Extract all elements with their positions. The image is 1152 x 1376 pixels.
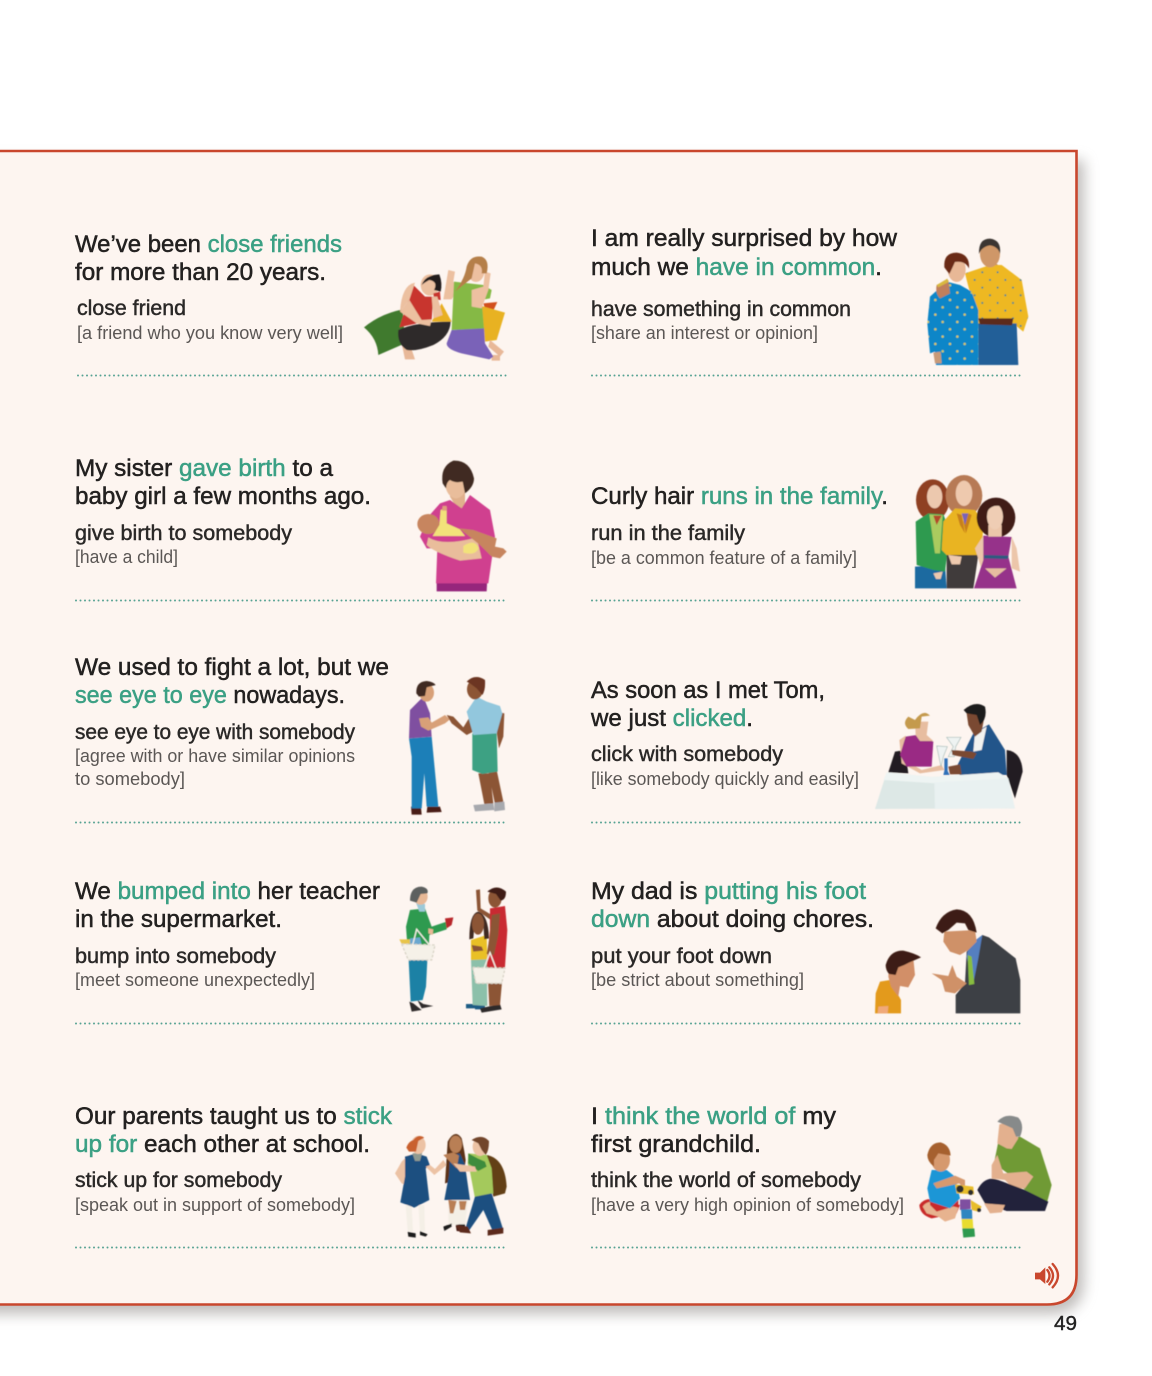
entry: see eye to eye: to somebody] (75, 769, 185, 789)
entry: gave birth: baby girl a few months ago. (75, 483, 371, 510)
entry: runs in the family (591, 475, 1021, 600)
entry: see eye to eye: see eye to eye nowadays. (75, 682, 345, 709)
entry: bumped into (75, 878, 507, 1024)
definition: [have a child] (75, 547, 178, 567)
entry: have in common: much we have in common. (591, 254, 882, 281)
definition: [be a common feature of a family] (591, 548, 857, 568)
example sentence: I think the world of my (591, 1103, 836, 1130)
illustration: woman and man in patterned shirts (927, 239, 1028, 365)
example sentence: We’ve been close friends (75, 231, 342, 258)
entry: bumped into: in the supermarket. (75, 906, 282, 933)
definition: [speak out in support of somebody] (75, 1195, 355, 1215)
entry: gave birth (75, 455, 507, 600)
idiom term: click with somebody (591, 743, 784, 766)
idiom term: close friend (77, 297, 186, 320)
idiom term: run in the family (591, 522, 746, 545)
example sentence: My dad is putting his foot (591, 878, 866, 905)
page number: 49 (1054, 1313, 1077, 1335)
definition: [share an interest or opinion] (591, 323, 818, 343)
entry: think the world of: first grandchild. (591, 1131, 761, 1158)
idiom term: have something in common (591, 298, 851, 321)
entry: see eye to eye (75, 654, 505, 822)
example sentence: As soon as I met Tom, (591, 677, 825, 704)
example sentence: My sister gave birth to a (75, 455, 334, 482)
example sentence: Our parents taught us to stick (75, 1103, 393, 1130)
idiom term: think the world of somebody (591, 1169, 862, 1192)
definition: [like somebody quickly and easily] (591, 769, 859, 789)
definition: [have a very high opinion of somebody] (591, 1195, 904, 1215)
illustration: father scolding boy (875, 909, 1020, 1013)
example sentence: We bumped into her teacher (75, 878, 380, 905)
idiom term: give birth to somebody (75, 522, 292, 545)
entry: clicked (590, 677, 1023, 822)
idiom term: see eye to eye with somebody (75, 721, 355, 744)
entry: putting his foot down (591, 878, 1021, 1024)
entry: have in common (591, 225, 1028, 376)
entry: close friends: for more than 20 years. (75, 259, 326, 286)
example sentence: We used to fight a lot, but we (75, 654, 389, 681)
illustration: meeting a teacher in the supermarket (399, 887, 507, 1013)
entry: close friends (75, 231, 507, 376)
definition: [agree with or have similar opinions (75, 746, 355, 766)
definition: [meet someone unexpectedly] (75, 970, 315, 990)
definition: [be strict about something] (591, 970, 804, 990)
entry: putting his foot down: down about doing chores. (591, 906, 874, 933)
entry: stick up for: up for each other at school. (75, 1131, 370, 1158)
idiom term: bump into somebody (75, 945, 277, 968)
illustration: three school children (395, 1134, 507, 1238)
entry: think the world of (591, 1103, 1052, 1248)
definition: [a friend who you know very well] (77, 323, 343, 343)
example sentence: Curly hair runs in the family. (591, 483, 888, 510)
page panel (0, 151, 1076, 1304)
illustration: two men shaking hands (409, 677, 505, 815)
illustration: grandfather and child playing with blocks (919, 1116, 1052, 1238)
idiom term: stick up for somebody (75, 1169, 282, 1192)
idiom term: put your foot down (591, 945, 772, 968)
entry: stick up for (75, 1103, 507, 1248)
illustration: mother holding baby (417, 461, 507, 591)
panel shadow (0, 160, 1084, 1314)
illustration: three women with curly hair (915, 475, 1020, 588)
example sentence: I am really surprised by how (591, 225, 898, 252)
icon: audio speaker (1035, 1264, 1058, 1287)
illustration: two women on cushions (364, 256, 505, 361)
entry: clicked: we just clicked. (590, 705, 753, 732)
illustration: couple at a restaurant table (875, 704, 1023, 809)
